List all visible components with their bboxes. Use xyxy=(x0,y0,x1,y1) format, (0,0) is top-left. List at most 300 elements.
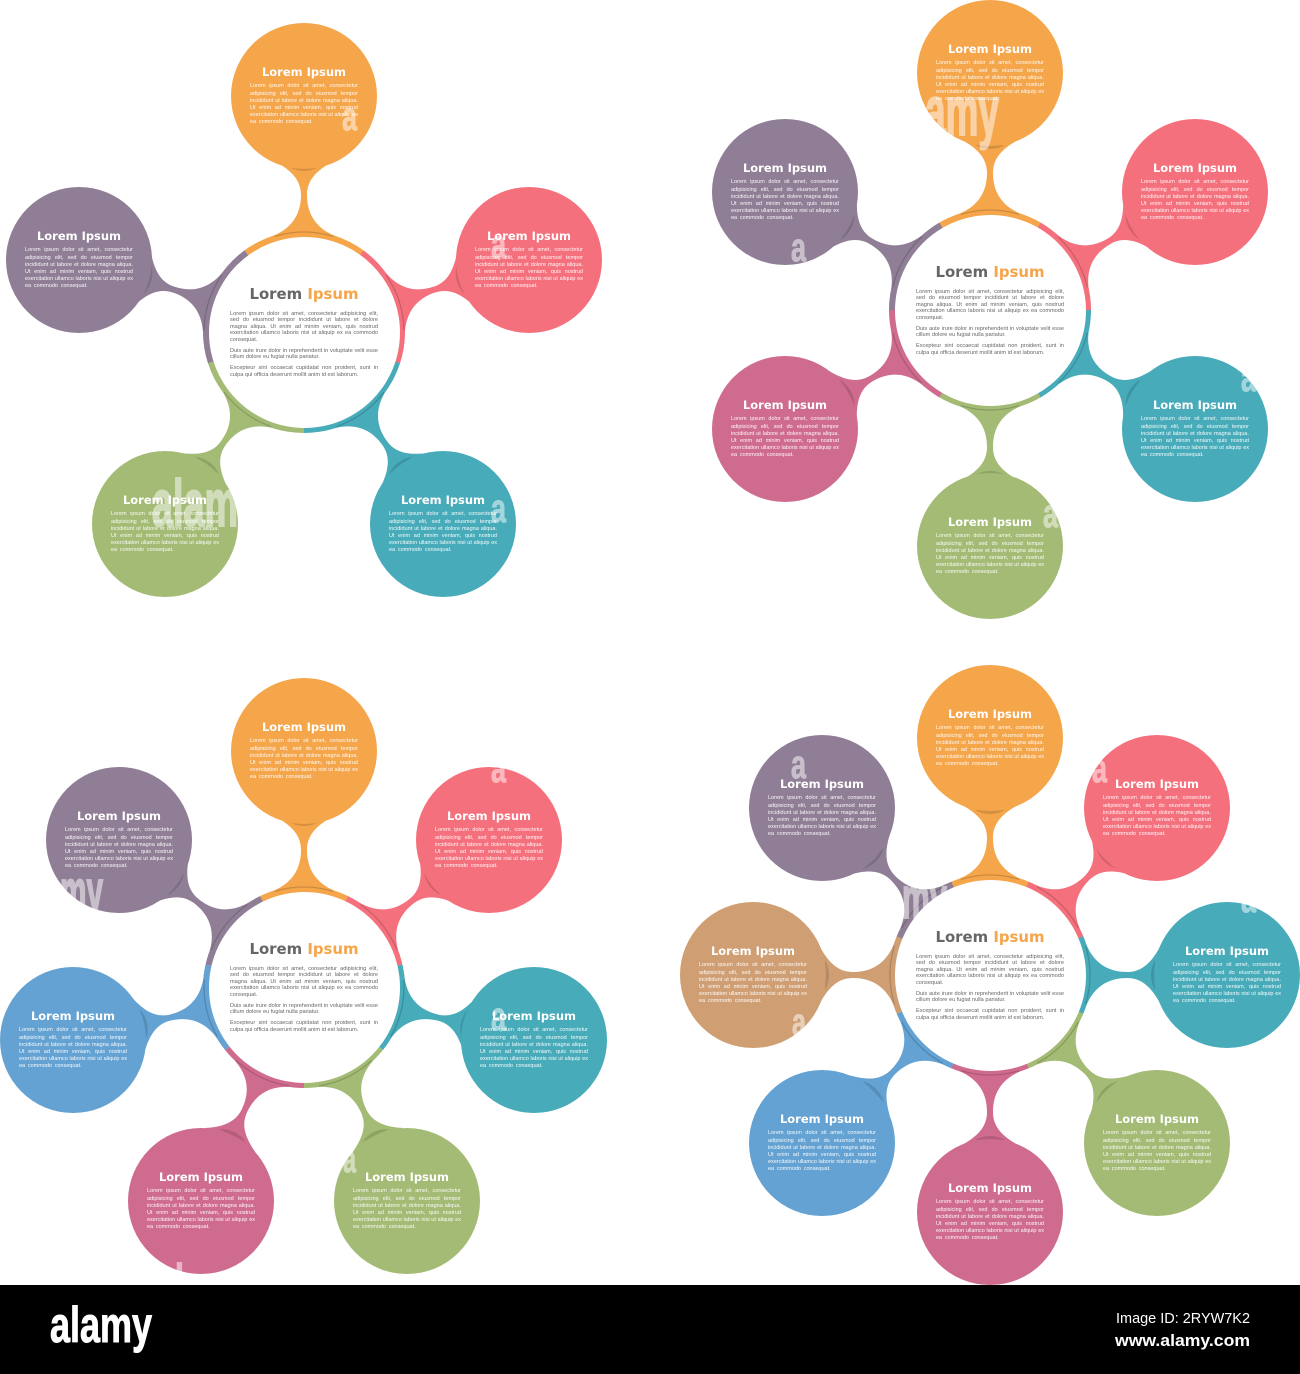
circle: purple: Lorem Ipsum xyxy=(780,777,864,791)
circle: tan: ea commodo consequat. xyxy=(699,998,762,1004)
center circle text: Duis aute irure dolor in reprehenderit in voluptate velit esse xyxy=(916,326,1064,332)
connector: teal xyxy=(990,936,1160,1014)
circle: purple: adipisicing elit, sed do eiusmod tempor xyxy=(25,255,133,261)
connector: orange xyxy=(940,140,1040,310)
center circle text: magna aliqua. Ut enim ad minim veniam, quis nostrud xyxy=(916,966,1064,972)
stock photo watermark fragments: a xyxy=(1092,747,1108,791)
circle: orange: ea commodo consequat. xyxy=(250,119,313,125)
circle: green: exercitation ullamco laboris nisi ut aliquip ex xyxy=(111,540,219,546)
circle: green xyxy=(92,451,238,597)
circle: green: exercitation ullamco laboris nisi ut aliquip ex xyxy=(936,562,1044,568)
circle: teal: Lorem ipsum dolor sit amet, consectetur xyxy=(1173,962,1281,968)
center circle text: Excepteur sint occaecat cupidatat non proident, sunt in xyxy=(230,1020,378,1026)
circle: teal: incididunt ut labore et dolore magna aliqua. xyxy=(480,1042,588,1048)
circle: orange: Lorem Ipsum xyxy=(262,65,346,79)
center circle text: magna aliqua. Ut enim ad minim veniam, quis nostrud xyxy=(230,978,378,984)
stock photo watermark fragments: a xyxy=(1241,877,1257,921)
circle: tan: Ut enim ad minim veniam, quis nostrud xyxy=(699,984,807,990)
circle: pink: Lorem ipsum dolor sit amet, consectetur xyxy=(936,1199,1044,1205)
connector: teal xyxy=(256,297,452,504)
circle: teal: ea commodo consequat. xyxy=(1141,452,1204,458)
circle: red: Ut enim ad minim veniam, quis nostrud xyxy=(1103,817,1211,823)
circle: orange: adipisicing elit, sed do eiusmod tempor xyxy=(936,68,1044,74)
connector: purple xyxy=(842,827,1017,1002)
circle: pink: Ut enim ad minim veniam, quis nostrud xyxy=(147,1210,255,1216)
connector: purple xyxy=(124,223,322,388)
circle: green: ea commodo consequat. xyxy=(1103,1166,1166,1172)
circle: teal: incididunt ut labore et dolore magna aliqua. xyxy=(1141,431,1249,437)
circle: green: Lorem Ipsum xyxy=(1115,1112,1199,1126)
circle: pink: Ut enim ad minim veniam, quis nostrud xyxy=(936,1221,1044,1227)
connector: tan xyxy=(820,936,990,1014)
circle: purple: Lorem Ipsum xyxy=(37,229,121,243)
circle: blue: Lorem ipsum dolor sit amet, consectetur xyxy=(19,1027,127,1033)
center circle text xyxy=(208,892,400,1082)
circle: teal: Lorem ipsum dolor sit amet, consectetur xyxy=(480,1027,588,1033)
connector: pink xyxy=(191,968,343,1159)
connector: red xyxy=(963,827,1138,1002)
connector: teal xyxy=(965,266,1162,439)
circle: purple: incididunt ut labore et dolore magna aliqua. xyxy=(25,262,133,268)
circle: red: Ut enim ad minim veniam, quis nostrud xyxy=(475,269,583,275)
circle: teal: Lorem Ipsum xyxy=(492,1009,576,1023)
circle: green: adipisicing elit, sed do eiusmod tempor xyxy=(353,1196,461,1202)
center circle text: Lorem ipsum dolor sit amet, consectetur adipisicing elit, xyxy=(230,310,378,316)
circle: red xyxy=(1122,119,1268,265)
connector: purple xyxy=(818,181,1015,354)
circle: red: Ut enim ad minim veniam, quis nostrud xyxy=(435,849,543,855)
circle: orange: ea commodo consequat. xyxy=(250,774,313,780)
circle: blue: adipisicing elit, sed do eiusmod tempor xyxy=(19,1035,127,1041)
circle: red: ea commodo consequat. xyxy=(1141,215,1204,221)
stock photo watermark fragments: a xyxy=(342,95,358,139)
circle: teal xyxy=(1154,902,1300,1048)
circle: red: Lorem ipsum dolor sit amet, consectetur xyxy=(1103,795,1211,801)
circle: purple: Lorem Ipsum xyxy=(743,161,827,175)
website: www.alamy.com xyxy=(1114,1331,1250,1350)
center circle text: exercitation ullamco laboris nisi ut aliquip ex ea commodo xyxy=(230,985,378,991)
center circle text: cillum dolore eu fugiat nulla pariatur. xyxy=(916,997,1006,1003)
center circle text: consequat. xyxy=(230,336,257,342)
center circle text: Excepteur sint occaecat cupidatat non proident, sunt in xyxy=(916,1008,1064,1014)
circle: orange: exercitation ullamco laboris nisi ut aliquip ex xyxy=(936,754,1044,760)
circle: orange: incididunt ut labore et dolore magna aliqua. xyxy=(250,98,358,104)
connector: red xyxy=(286,223,484,388)
circle: green: Ut enim ad minim veniam, quis nostrud xyxy=(1103,1152,1211,1158)
circle: orange: exercitation ullamco laboris nisi ut aliquip ex xyxy=(250,112,358,118)
circle: purple: Lorem ipsum dolor sit amet, consectetur xyxy=(768,795,876,801)
circle: teal: adipisicing elit, sed do eiusmod tempor xyxy=(1173,970,1281,976)
center circle text: consequat. xyxy=(916,314,943,320)
center circle text: culpa qui officia deserunt mollit anim id est laborum. xyxy=(916,1014,1044,1020)
circle: teal: Lorem Ipsum xyxy=(401,493,485,507)
connector: purple xyxy=(144,847,331,1021)
circle: orange: incididunt ut labore et dolore magna aliqua. xyxy=(936,740,1044,746)
circle: red: incididunt ut labore et dolore magna aliqua. xyxy=(1141,194,1249,200)
stock photo watermark fragments: a xyxy=(791,226,807,270)
circle: pink xyxy=(128,1128,274,1274)
circle: purple: ea commodo consequat. xyxy=(65,863,128,869)
circle: pink: ea commodo consequat. xyxy=(936,1235,999,1241)
circle: purple: adipisicing elit, sed do eiusmod tempor xyxy=(731,187,839,193)
connector: pink xyxy=(818,266,1015,439)
circle: green: ea commodo consequat. xyxy=(111,547,174,553)
circle: teal: adipisicing elit, sed do eiusmod tempor xyxy=(1141,424,1249,430)
circle: purple: incididunt ut labore et dolore magna aliqua. xyxy=(731,194,839,200)
circle: teal: exercitation ullamco laboris nisi ut aliquip ex xyxy=(480,1056,588,1062)
circle: green: Lorem ipsum dolor sit amet, consectetur xyxy=(111,511,219,517)
connectors: ring and stems for seven circles xyxy=(132,820,472,1152)
connector: green xyxy=(265,968,417,1159)
center circle text: Excepteur sint occaecat cupidatat non proident, sunt in xyxy=(230,365,378,371)
circle: orange: Lorem ipsum dolor sit amet, consectetur xyxy=(936,60,1044,66)
circle: orange: incididunt ut labore et dolore magna aliqua. xyxy=(250,753,358,759)
panel: diagram with five circles xyxy=(6,23,602,597)
circle: purple xyxy=(46,767,192,913)
circle: teal: exercitation ullamco laboris nisi ut aliquip ex xyxy=(1141,445,1249,451)
stock photo watermark fragments: a xyxy=(792,1002,807,1044)
stock photo watermark fragments: lam xyxy=(175,1251,230,1324)
circle: purple: incididunt ut labore et dolore magna aliqua. xyxy=(65,842,173,848)
circle: tan: adipisicing elit, sed do eiusmod tempor xyxy=(699,970,807,976)
connector: green xyxy=(156,297,352,504)
circle: teal: Lorem Ipsum xyxy=(1185,944,1269,958)
center circle text: exercitation ullamco laboris nisi ut aliquip ex ea commodo xyxy=(230,330,378,336)
circle: red: adipisicing elit, sed do eiusmod tempor xyxy=(1103,803,1211,809)
circle: orange: Ut enim ad minim veniam, quis nostrud xyxy=(250,105,358,111)
circle: blue: exercitation ullamco laboris nisi ut aliquip ex xyxy=(19,1056,127,1062)
circle: purple: Lorem ipsum dolor sit amet, consectetur xyxy=(65,827,173,833)
circle: green xyxy=(917,473,1063,619)
circle: purple: exercitation ullamco laboris nisi ut aliquip ex xyxy=(731,208,839,214)
center circle text: Lorem Ipsum xyxy=(935,262,1045,280)
connector: pink xyxy=(951,975,1029,1145)
stock photo watermark fragments: my xyxy=(60,859,103,924)
circle: blue: Ut enim ad minim veniam, quis nostrud xyxy=(768,1152,876,1158)
circle: orange: incididunt ut labore et dolore magna aliqua. xyxy=(936,75,1044,81)
circle: red: incididunt ut labore et dolore magna aliqua. xyxy=(475,262,583,268)
connector: teal xyxy=(294,944,479,1068)
center circle text: Lorem Ipsum xyxy=(249,940,359,958)
circle: orange: exercitation ullamco laboris nisi ut aliquip ex xyxy=(250,767,358,773)
circle: orange: Ut enim ad minim veniam, quis nostrud xyxy=(936,82,1044,88)
center circle text: cillum dolore eu fugiat nulla pariatur. xyxy=(916,332,1006,338)
connectors: ring and stems for five circles xyxy=(138,165,470,484)
center circle text: Lorem ipsum dolor sit amet, consectetur adipisicing elit, xyxy=(230,966,378,972)
circle: red: incididunt ut labore et dolore magna aliqua. xyxy=(1103,810,1211,816)
stock photo watermark fragments: a xyxy=(1241,356,1257,400)
circle: orange: ea commodo consequat. xyxy=(936,96,999,102)
circle: green: incididunt ut labore et dolore magna aliqua. xyxy=(111,526,219,532)
circle: pink: incididunt ut labore et dolore magna aliqua. xyxy=(936,1214,1044,1220)
circle: orange xyxy=(917,665,1063,811)
circle: green: exercitation ullamco laboris nisi ut aliquip ex xyxy=(1103,1159,1211,1165)
circle: pink: Lorem Ipsum xyxy=(159,1170,243,1184)
circle: purple: exercitation ullamco laboris nisi ut aliquip ex xyxy=(65,856,173,862)
center circle text xyxy=(894,214,1086,406)
circle: red: adipisicing elit, sed do eiusmod tempor xyxy=(435,835,543,841)
circle: purple: ea commodo consequat. xyxy=(731,215,794,221)
stock photo watermark fragments: alam xyxy=(152,466,238,540)
stock photo watermark fragments: a xyxy=(491,995,507,1039)
circle: teal xyxy=(461,967,607,1113)
circle: teal: Lorem ipsum dolor sit amet, consectetur xyxy=(389,511,497,517)
circle: blue: Lorem Ipsum xyxy=(780,1112,864,1126)
connector: blue xyxy=(842,948,1017,1123)
center circle text: Duis aute irure dolor in reprehenderit in voluptate velit esse xyxy=(916,990,1064,996)
circle: orange: adipisicing elit, sed do eiusmod tempor xyxy=(250,91,358,97)
center circle text: magna aliqua. Ut enim ad minim veniam, quis nostrud xyxy=(916,302,1064,308)
circle: teal: Ut enim ad minim veniam, quis nostrud xyxy=(1173,984,1281,990)
circle: orange xyxy=(231,23,377,169)
circle: purple: exercitation ullamco laboris nisi ut aliquip ex xyxy=(25,276,133,282)
circle: purple: adipisicing elit, sed do eiusmod tempor xyxy=(65,835,173,841)
center circle text xyxy=(894,880,1086,1070)
panel: diagram with six circles xyxy=(712,0,1268,619)
circle: red: adipisicing elit, sed do eiusmod tempor xyxy=(1141,187,1249,193)
circle: teal: Ut enim ad minim veniam, quis nostrud xyxy=(389,533,497,539)
circle: teal xyxy=(370,451,516,597)
circle: orange: Lorem Ipsum xyxy=(948,42,1032,56)
connector: green xyxy=(940,310,1040,480)
circle: purple: Ut enim ad minim veniam, quis nostrud xyxy=(65,849,173,855)
circle: green: ea commodo consequat. xyxy=(936,569,999,575)
circle: purple xyxy=(6,187,152,333)
circle: red: ea commodo consequat. xyxy=(1103,831,1166,837)
circle: orange: adipisicing elit, sed do eiusmod tempor xyxy=(250,746,358,752)
center circle text: culpa qui officia deserunt mollit anim id est laborum. xyxy=(916,350,1044,356)
circle: pink: incididunt ut labore et dolore magna aliqua. xyxy=(731,431,839,437)
circle: tan: Lorem Ipsum xyxy=(711,944,795,958)
circle: teal: incididunt ut labore et dolore magna aliqua. xyxy=(389,526,497,532)
stock photo watermark fragments: my xyxy=(902,866,947,931)
stock photo watermark fragments: a xyxy=(1043,492,1059,536)
circle: tan xyxy=(680,902,826,1048)
circle: orange: adipisicing elit, sed do eiusmod tempor xyxy=(936,733,1044,739)
center circle text: sed do eiusmod tempor incididunt ut labore et dolore xyxy=(230,317,378,323)
circle: orange: exercitation ullamco laboris nisi ut aliquip ex xyxy=(936,89,1044,95)
center circle text: sed do eiusmod tempor incididunt ut labore et dolore xyxy=(916,960,1064,966)
circle: green: Lorem Ipsum xyxy=(123,493,207,507)
circle: orange: Ut enim ad minim veniam, quis nostrud xyxy=(250,760,358,766)
circle: blue: Lorem ipsum dolor sit amet, consectetur xyxy=(768,1130,876,1136)
circle: green xyxy=(1084,1070,1230,1216)
circle: purple: Lorem ipsum dolor sit amet, consectetur xyxy=(25,247,133,253)
connector: orange xyxy=(260,817,348,987)
circle: red: Lorem Ipsum xyxy=(487,229,571,243)
center circle text: exercitation ullamco laboris nisi ut aliquip ex ea commodo xyxy=(916,973,1064,979)
circle: blue: Lorem Ipsum xyxy=(31,1009,115,1023)
image id: Image ID: 2RYW7K2 xyxy=(1116,1310,1250,1327)
circle: pink: Ut enim ad minim veniam, quis nostrud xyxy=(731,438,839,444)
circle: red: exercitation ullamco laboris nisi ut aliquip ex xyxy=(1141,208,1249,214)
circle: green: Lorem ipsum dolor sit amet, consectetur xyxy=(1103,1130,1211,1136)
center circle text: culpa qui officia deserunt mollit anim id est laborum. xyxy=(230,1026,358,1032)
circle: teal: ea commodo consequat. xyxy=(389,547,452,553)
circle: red: ea commodo consequat. xyxy=(435,863,498,869)
circle: red: Lorem Ipsum xyxy=(1153,161,1237,175)
circle: red: exercitation ullamco laboris nisi ut aliquip ex xyxy=(1103,824,1211,830)
center circle text: Lorem Ipsum xyxy=(935,928,1045,946)
circle: red: adipisicing elit, sed do eiusmod tempor xyxy=(475,255,583,261)
circle: teal: adipisicing elit, sed do eiusmod tempor xyxy=(480,1035,588,1041)
circle: pink: ea commodo consequat. xyxy=(731,452,794,458)
circle: teal: Ut enim ad minim veniam, quis nostrud xyxy=(1141,438,1249,444)
circle: green: ea commodo consequat. xyxy=(353,1224,416,1230)
circle: green: Lorem Ipsum xyxy=(948,515,1032,529)
circle: orange: Ut enim ad minim veniam, quis nostrud xyxy=(936,747,1044,753)
circle: purple xyxy=(749,735,895,881)
circle: purple: Ut enim ad minim veniam, quis nostrud xyxy=(731,201,839,207)
connector: red xyxy=(277,847,464,1021)
circle: purple: adipisicing elit, sed do eiusmod tempor xyxy=(768,803,876,809)
circle: green: Lorem Ipsum xyxy=(365,1170,449,1184)
circle: pink: adipisicing elit, sed do eiusmod tempor xyxy=(731,424,839,430)
circle: pink: exercitation ullamco laboris nisi ut aliquip ex xyxy=(731,445,839,451)
circle: purple: Ut enim ad minim veniam, quis nostrud xyxy=(25,269,133,275)
circle: orange: Lorem ipsum dolor sit amet, consectetur xyxy=(250,738,358,744)
circle: teal: ea commodo consequat. xyxy=(1173,998,1236,1004)
connector: orange xyxy=(245,162,363,332)
circle: pink xyxy=(712,356,858,502)
center circle text: Lorem ipsum dolor sit amet, consectetur adipisicing elit, xyxy=(916,954,1064,960)
circle: orange xyxy=(231,678,377,824)
center circle text: culpa qui officia deserunt mollit anim id est laborum. xyxy=(230,372,358,378)
panel: diagram with eight circles xyxy=(680,665,1300,1285)
circle: green: adipisicing elit, sed do eiusmod tempor xyxy=(936,541,1044,547)
circle: teal: Lorem ipsum dolor sit amet, consectetur xyxy=(1141,416,1249,422)
center circle text: magna aliqua. Ut enim ad minim veniam, quis nostrud xyxy=(230,324,378,330)
circle: teal: Lorem Ipsum xyxy=(1153,398,1237,412)
circle: blue xyxy=(749,1070,895,1216)
connectors: ring and stems for eight circles xyxy=(820,806,1160,1144)
center circle text: exercitation ullamco laboris nisi ut aliquip ex ea commodo xyxy=(916,308,1064,314)
circle: blue: Ut enim ad minim veniam, quis nostrud xyxy=(19,1049,127,1055)
center circle text: Duis aute irure dolor in reprehenderit in voluptate velit esse xyxy=(230,1002,378,1008)
stock photo watermark fragments: a xyxy=(791,743,807,787)
circle: green: exercitation ullamco laboris nisi ut aliquip ex xyxy=(353,1217,461,1223)
circle: green: incididunt ut labore et dolore magna aliqua. xyxy=(1103,1145,1211,1151)
circle: pink: Lorem Ipsum xyxy=(743,398,827,412)
footer bar with logo and image id xyxy=(0,1285,1300,1374)
circle: pink: Lorem ipsum dolor sit amet, consectetur xyxy=(731,416,839,422)
circle: teal: adipisicing elit, sed do eiusmod tempor xyxy=(389,519,497,525)
circle: teal: exercitation ullamco laboris nisi ut aliquip ex xyxy=(1173,991,1281,997)
circle: pink: adipisicing elit, sed do eiusmod tempor xyxy=(936,1207,1044,1213)
circle: green: Lorem ipsum dolor sit amet, consectetur xyxy=(353,1188,461,1194)
circle: purple: ea commodo consequat. xyxy=(768,831,831,837)
circle: orange: Lorem Ipsum xyxy=(262,720,346,734)
circle: pink: adipisicing elit, sed do eiusmod tempor xyxy=(147,1196,255,1202)
center circle text: cillum dolore eu fugiat nulla pariatur. xyxy=(230,354,320,360)
circle: pink: Lorem ipsum dolor sit amet, consectetur xyxy=(147,1188,255,1194)
circle: purple: ea commodo consequat. xyxy=(25,283,88,289)
circle: green: Lorem ipsum dolor sit amet, consectetur xyxy=(936,533,1044,539)
connector: blue xyxy=(129,944,314,1068)
circle: red: Lorem ipsum dolor sit amet, consectetur xyxy=(1141,179,1249,185)
circle: red xyxy=(416,767,562,913)
stock photo watermark fragments: a xyxy=(491,487,507,531)
circle: green: adipisicing elit, sed do eiusmod tempor xyxy=(111,519,219,525)
circle: red: Lorem Ipsum xyxy=(1115,777,1199,791)
circle: blue xyxy=(0,967,146,1113)
circle: green: incididunt ut labore et dolore magna aliqua. xyxy=(353,1203,461,1209)
connector: green xyxy=(963,948,1138,1123)
circle: blue: ea commodo consequat. xyxy=(768,1166,831,1172)
center circle text: Lorem ipsum dolor sit amet, consectetur adipisicing elit, xyxy=(916,288,1064,294)
circle: purple: incididunt ut labore et dolore magna aliqua. xyxy=(768,810,876,816)
circle: pink xyxy=(917,1139,1063,1285)
circle: blue: incididunt ut labore et dolore magna aliqua. xyxy=(768,1145,876,1151)
circle: orange: Lorem ipsum dolor sit amet, consectetur xyxy=(936,725,1044,731)
center circle text: sed do eiusmod tempor incididunt ut labore et dolore xyxy=(916,295,1064,301)
stock photo watermark fragments: a xyxy=(491,223,507,267)
circle: orange xyxy=(917,0,1063,146)
stock photo watermark fragments: amy xyxy=(925,72,999,150)
logo: alamy: alamy xyxy=(50,1297,152,1353)
circle: green: incididunt ut labore et dolore magna aliqua. xyxy=(936,548,1044,554)
circle: green: Ut enim ad minim veniam, quis nostrud xyxy=(936,555,1044,561)
circle: teal: exercitation ullamco laboris nisi ut aliquip ex xyxy=(389,540,497,546)
circle: purple: Lorem ipsum dolor sit amet, consectetur xyxy=(731,179,839,185)
circle: pink: Lorem Ipsum xyxy=(948,1181,1032,1195)
connector: red xyxy=(965,181,1162,354)
circle: teal: incididunt ut labore et dolore magna aliqua. xyxy=(1173,977,1281,983)
circle: tan: exercitation ullamco laboris nisi ut aliquip ex xyxy=(699,991,807,997)
circle: pink: exercitation ullamco laboris nisi ut aliquip ex xyxy=(936,1228,1044,1234)
circle: red: Lorem ipsum dolor sit amet, consectetur xyxy=(475,247,583,253)
circle: blue: adipisicing elit, sed do eiusmod tempor xyxy=(768,1138,876,1144)
circle: orange: ea commodo consequat. xyxy=(936,761,999,767)
center circle text: consequat. xyxy=(916,980,943,986)
center circle text: cillum dolore eu fugiat nulla pariatur. xyxy=(230,1009,320,1015)
center circle text xyxy=(208,236,400,428)
circle: red: Lorem Ipsum xyxy=(447,809,531,823)
circle: green: Ut enim ad minim veniam, quis nostrud xyxy=(111,533,219,539)
connector: orange xyxy=(951,805,1029,975)
circle: red: exercitation ullamco laboris nisi ut aliquip ex xyxy=(435,856,543,862)
circle: teal: ea commodo consequat. xyxy=(480,1063,543,1069)
circle: blue: ea commodo consequat. xyxy=(19,1063,82,1069)
circle: pink: ea commodo consequat. xyxy=(147,1224,210,1230)
circle: purple: Lorem Ipsum xyxy=(77,809,161,823)
circle: orange: Lorem ipsum dolor sit amet, consectetur xyxy=(250,83,358,89)
circle: green xyxy=(334,1128,480,1274)
circle: purple: exercitation ullamco laboris nisi ut aliquip ex xyxy=(768,824,876,830)
circle: red: incididunt ut labore et dolore magna aliqua. xyxy=(435,842,543,848)
circle: red: Ut enim ad minim veniam, quis nostrud xyxy=(1141,201,1249,207)
circle: tan: Lorem ipsum dolor sit amet, consectetur xyxy=(699,962,807,968)
center circle text: consequat. xyxy=(230,992,257,998)
circle: red xyxy=(456,187,602,333)
center circle text: Lorem Ipsum xyxy=(249,284,359,302)
circle: red xyxy=(1084,735,1230,881)
circle: teal xyxy=(1122,356,1268,502)
circle: tan: incididunt ut labore et dolore magna aliqua. xyxy=(699,977,807,983)
circle: blue: incididunt ut labore et dolore magna aliqua. xyxy=(19,1042,127,1048)
center circle text: Excepteur sint occaecat cupidatat non proident, sunt in xyxy=(916,343,1064,349)
circle: red: Lorem ipsum dolor sit amet, consectetur xyxy=(435,827,543,833)
stock photo watermark fragments: a xyxy=(343,1139,357,1181)
circle: orange: Lorem Ipsum xyxy=(948,707,1032,721)
center circle text: sed do eiusmod tempor incididunt ut labore et dolore xyxy=(230,972,378,978)
connectors: ring and stems for six circles xyxy=(829,140,1151,477)
center circle text: Duis aute irure dolor in reprehenderit in voluptate velit esse xyxy=(230,348,378,354)
circle: red: exercitation ullamco laboris nisi ut aliquip ex xyxy=(475,276,583,282)
circle: blue: exercitation ullamco laboris nisi ut aliquip ex xyxy=(768,1159,876,1165)
circle: pink: exercitation ullamco laboris nisi ut aliquip ex xyxy=(147,1217,255,1223)
stock photo watermark fragments: a xyxy=(491,747,507,791)
